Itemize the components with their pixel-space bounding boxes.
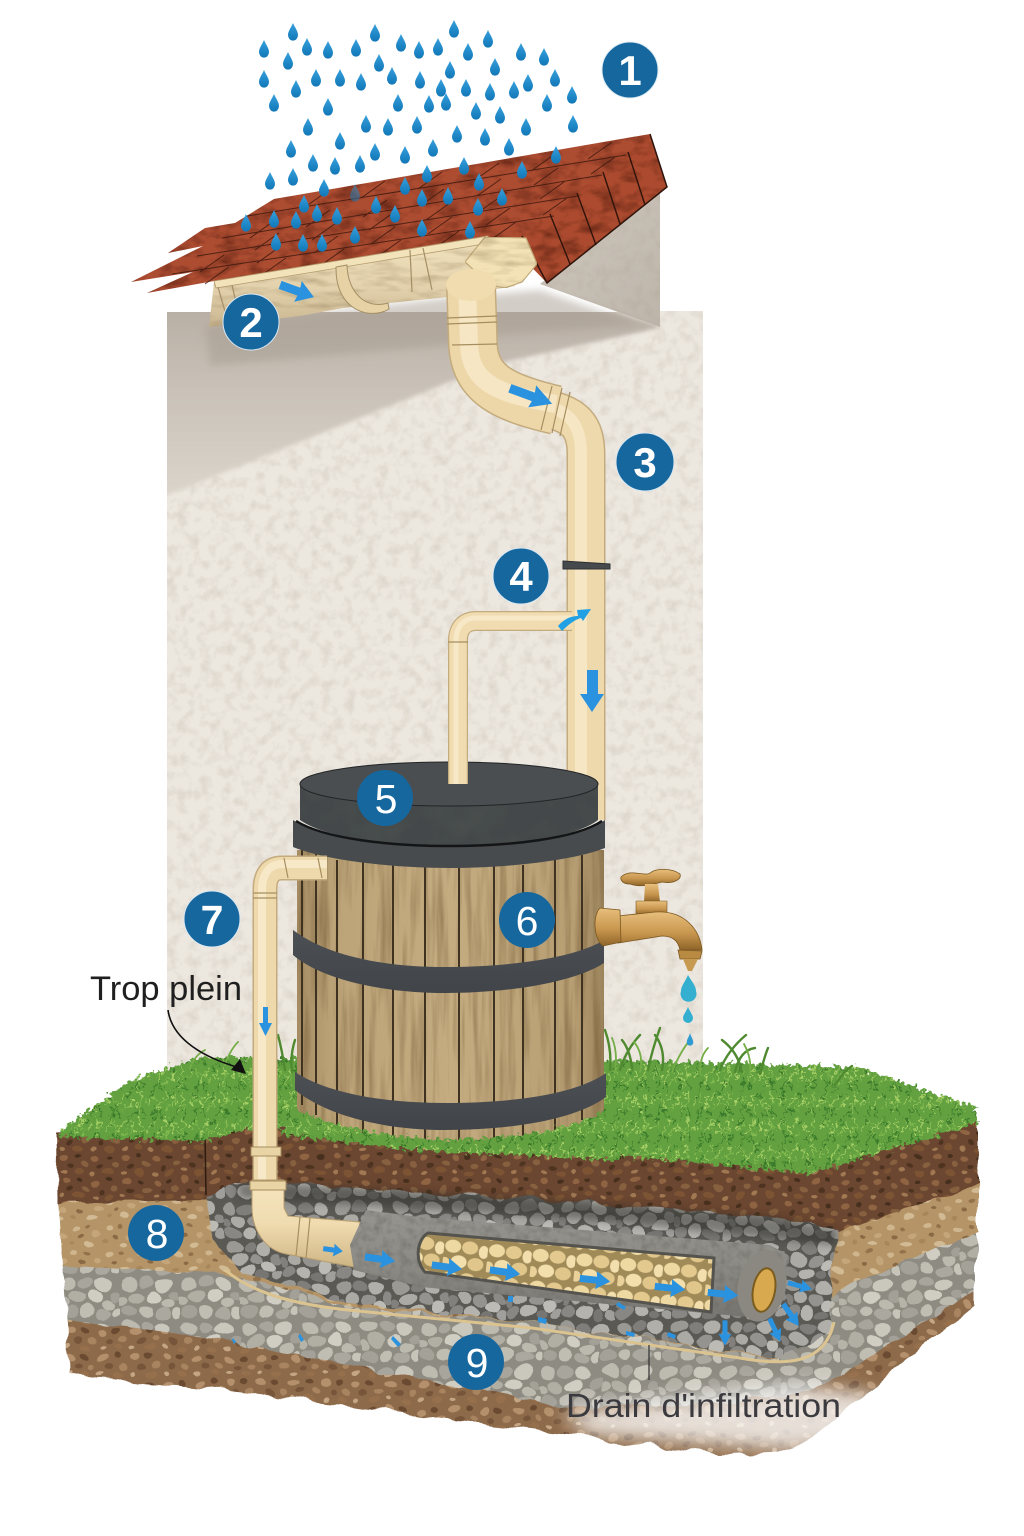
trench rim — [225, 1270, 834, 1362]
number badge 3: 3 — [633, 439, 657, 486]
roof top face — [131, 134, 650, 293]
drain gray sleeve — [350, 1210, 788, 1318]
rain drops — [259, 20, 578, 190]
gutter — [209, 236, 537, 327]
number badge 6 — [499, 892, 555, 948]
label: Trop plein — [90, 970, 246, 1074]
ground block — [57, 1057, 978, 1455]
pipe top — [446, 269, 496, 301]
gutter end cap — [465, 237, 537, 288]
wall — [160, 190, 703, 1090]
number badge 9 — [448, 1334, 504, 1390]
rain barrel — [280, 762, 622, 1160]
bottom soil layer — [66, 1240, 975, 1455]
faucet — [595, 869, 702, 1046]
soil step crack — [205, 1135, 206, 1195]
barrel staves — [297, 850, 604, 1142]
rain drops on roof — [241, 146, 561, 252]
arrow: branch split — [558, 609, 591, 631]
cast shadow on wall — [167, 310, 661, 496]
grass in front of barrel base — [280, 1108, 622, 1160]
drain open end — [731, 1246, 793, 1326]
number badge 5 — [357, 770, 413, 826]
faucet body and spout — [618, 912, 702, 950]
roof — [131, 134, 667, 293]
number badge 4 — [493, 548, 549, 604]
faucet handle — [621, 869, 680, 886]
faucet wall nut — [595, 908, 621, 946]
number badge 2: 2 — [239, 299, 263, 346]
arrow: trop plein leader — [168, 1010, 246, 1074]
barrel band middle — [293, 930, 604, 993]
infiltration drain — [232, 1210, 814, 1347]
faucet stem — [644, 884, 660, 902]
number badge 4: 4 — [509, 553, 533, 600]
gutter bracket — [336, 265, 389, 313]
label: Drain d'infiltration — [560, 1345, 880, 1450]
number badge 7 — [184, 891, 240, 947]
trench with gravel — [206, 1183, 837, 1357]
number badge 2 — [223, 294, 279, 350]
number badge 7: 7 — [201, 897, 223, 943]
overflow pipe — [250, 858, 360, 1267]
arrow: elbow flow — [506, 377, 556, 415]
gutter body — [209, 237, 515, 327]
number badge 1 — [602, 42, 658, 98]
gable wall under the roof — [540, 190, 660, 327]
branch pipe to barrel — [448, 609, 591, 784]
sand layer — [58, 1175, 978, 1358]
number badge 8 — [128, 1205, 184, 1261]
faucet water drops — [680, 975, 696, 1046]
arrow: gutter flow — [276, 274, 318, 308]
number badge 8: 8 — [146, 1211, 168, 1257]
roof tile lines — [172, 142, 626, 284]
label: Drain d'infiltration: Drain d'infiltration — [566, 1387, 841, 1424]
number badge 6: 6 — [516, 898, 538, 944]
barrel band lower — [295, 1072, 606, 1130]
roof side face — [505, 134, 667, 283]
trench top shadow — [237, 1183, 837, 1245]
drain yellow stone core — [418, 1233, 714, 1312]
number badge 1: 1 — [618, 47, 642, 94]
gutter shadow block — [205, 290, 640, 366]
number badge 9: 9 — [466, 1340, 488, 1386]
arrow: downpipe flow — [580, 670, 604, 712]
seepage drops — [232, 1296, 676, 1347]
overflow pipe lower section — [252, 1180, 360, 1267]
number badge 3 — [616, 433, 674, 491]
pipe collars — [447, 316, 570, 436]
grass tufts — [190, 1028, 852, 1085]
pipe joints — [251, 1147, 281, 1156]
downpipe — [446, 269, 610, 820]
pipe clamp — [563, 561, 610, 569]
topsoil layer — [57, 1115, 978, 1232]
number badge 5: 5 — [375, 776, 397, 822]
grass — [58, 1057, 978, 1174]
arrow: overflow flow — [259, 1007, 272, 1036]
label: Trop plein: Trop plein — [90, 970, 242, 1008]
barrel collar — [293, 820, 605, 868]
gray stone layer — [62, 1228, 975, 1407]
barrel lid — [296, 762, 602, 846]
blue flow arrows in drain — [322, 1242, 814, 1346]
